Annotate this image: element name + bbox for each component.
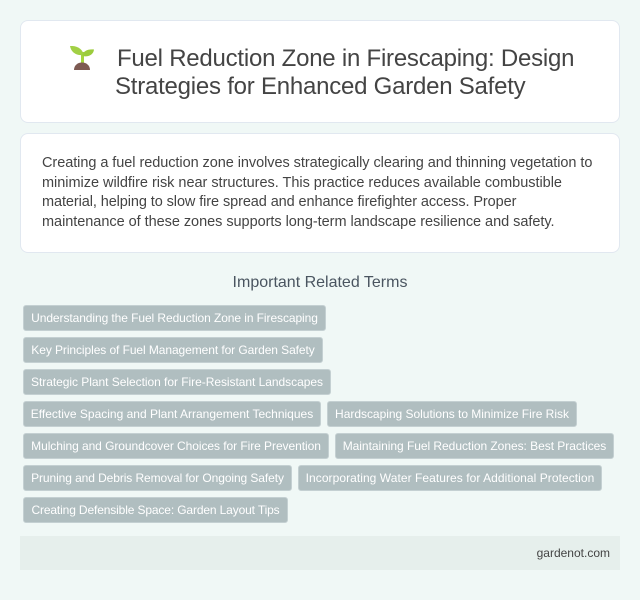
title: Fuel Reduction Zone in Firescaping: Design [117,45,574,72]
tag [23,369,331,395]
heading: important related terms: Important Related Terms [233,274,407,291]
panel: related terms tags [23,305,614,523]
tag [23,433,329,459]
tag: Pruning and Debris Removal for Ongoing Safety [31,471,284,485]
description text: Creating a fuel reduction zone involves strategically clearing and thinning vegetation to [42,155,592,171]
description text: minimize wildfire risk near structures. This practice reduces available combustible [42,174,562,190]
description text [42,155,592,230]
tag: Understanding the Fuel Reduction Zone in Firescaping [31,311,318,325]
tag [23,305,326,331]
footer bar [20,536,620,570]
tag [327,401,577,427]
title [115,45,574,100]
panel: title card [20,20,620,123]
tag: Creating Defensible Space: Garden Layout Tips [31,503,280,517]
description text: material, helping to slow fire spread and enhance firefighter access. Proper [42,194,516,210]
tag [298,465,602,491]
tag: Incorporating Water Features for Additional Protection [306,471,594,485]
tag [335,433,614,459]
tag: Mulching and Groundcover Choices for Fire Prevention [31,439,321,453]
tag: Effective Spacing and Plant Arrangement Techniques [31,407,313,421]
panel: description card [20,133,620,253]
description text: maintenance of these zones supports long-term landscape resilience and safety. [42,214,554,230]
tag [23,401,321,427]
tag [23,497,288,523]
tag: Key Principles of Fuel Management for Garden Safety [31,343,315,357]
icon: sprout [70,46,94,70]
tag: Maintaining Fuel Reduction Zones: Best Practices [343,439,606,453]
tag [23,465,292,491]
tag [23,337,323,363]
title: Strategies for Enhanced Garden Safety [115,73,525,100]
tag: Strategic Plant Selection for Fire-Resistant Landscapes [31,375,323,389]
footer source text: gardenot.com [537,546,610,560]
tag: Hardscaping Solutions to Minimize Fire Risk [335,407,569,421]
